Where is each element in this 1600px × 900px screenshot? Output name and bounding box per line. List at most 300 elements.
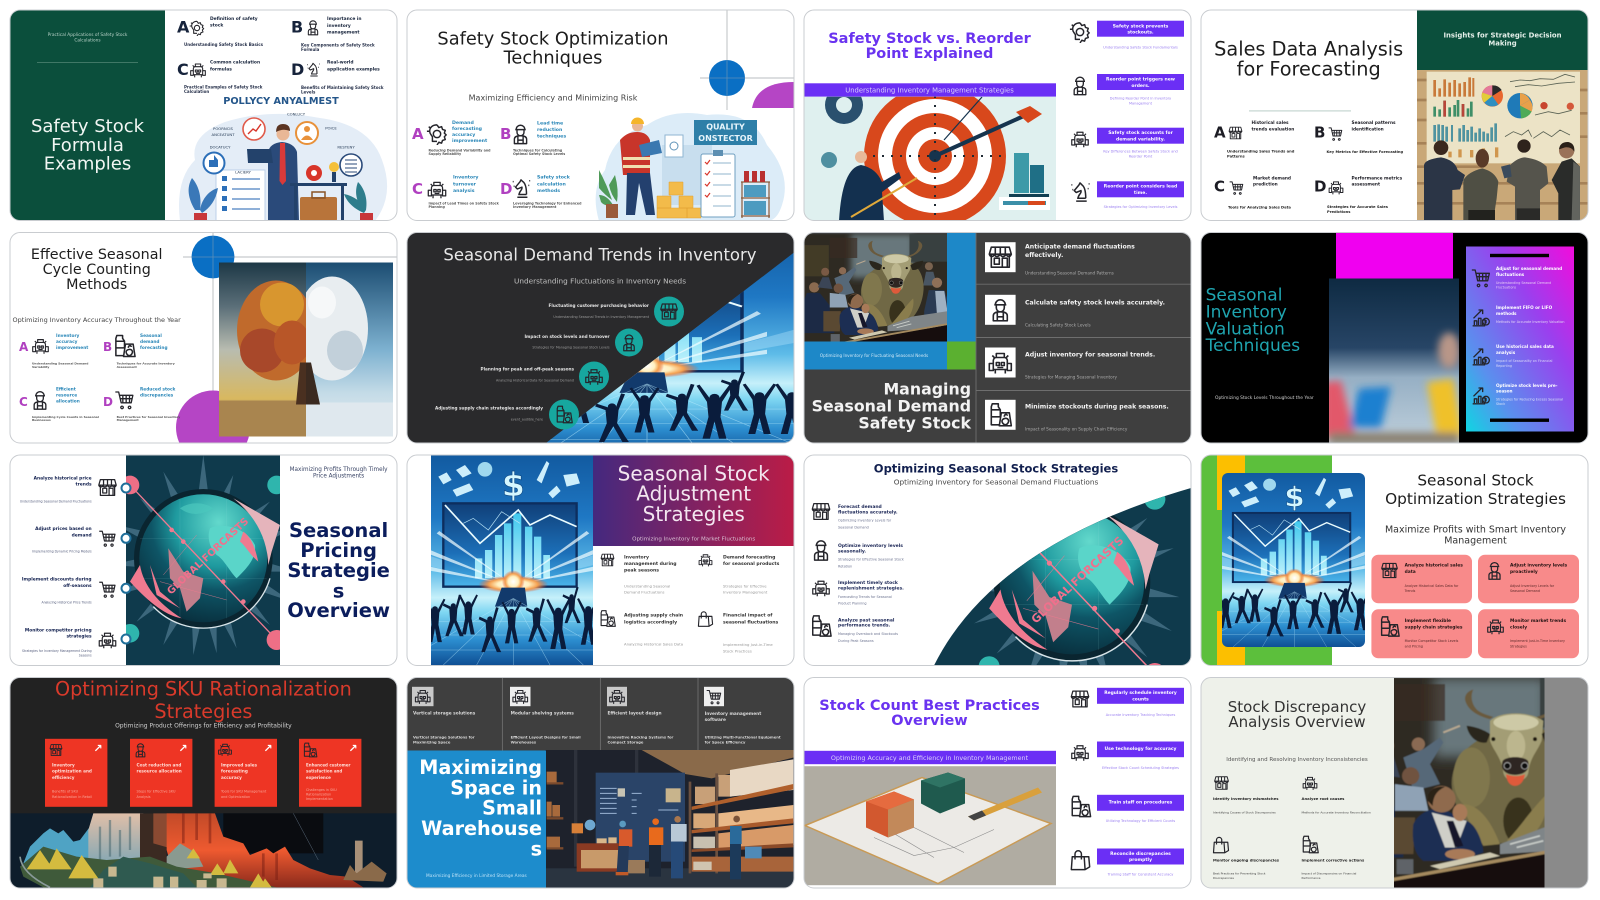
- item 4: [985, 400, 1169, 432]
- item B: demand: [140, 339, 160, 345]
- card 2: Adjust inventory levels: [1510, 562, 1568, 568]
- panel: title header: [593, 455, 794, 546]
- item 1: Analyze historical price: [34, 475, 92, 481]
- item 2: seasonally.: [838, 548, 866, 554]
- subtitle: Maximizing Profits Through Timely: [290, 467, 388, 473]
- item 3: Planning for peak and off-peak seasons: [481, 367, 575, 372]
- item 3: Utilizing Technology for Efficient Counts: [1106, 819, 1175, 823]
- column 4: for Space Efficiency: [705, 740, 746, 744]
- card 3: ↗: [263, 742, 273, 755]
- card 4: Strategies: [1510, 645, 1527, 649]
- item 1: Identifying Causes of Stock Discrepancies: [1213, 810, 1276, 814]
- step 1: Understanding Seasonal Demand: [1496, 281, 1551, 285]
- subtitle band: [804, 83, 1056, 97]
- step 2: [1473, 304, 1565, 326]
- item 2: for seasonal products: [723, 560, 780, 566]
- column 3: Compact Storage: [608, 740, 644, 744]
- item 1: [549, 296, 684, 326]
- item 4: Adjusting supply chain strategies accordingly: [435, 406, 543, 411]
- item C: allocation: [56, 398, 80, 404]
- item C: C: [412, 180, 423, 198]
- item 2: Management: [1129, 102, 1153, 106]
- item 1: Understanding Seasonal Trends in Inventory Management: [553, 315, 650, 319]
- item 3: Product Planning: [838, 602, 867, 606]
- item A: improvement: [452, 138, 488, 144]
- card 1: efficiency: [52, 774, 75, 779]
- item D: Performance metrics: [1352, 175, 1403, 181]
- title: Safety Stock: [31, 116, 145, 136]
- item 2: [699, 554, 780, 594]
- item C: Businesses: [32, 418, 51, 422]
- panel: gradient steps: [1466, 246, 1574, 432]
- title: Effective Seasonal: [31, 247, 162, 263]
- item D: discrepancies: [140, 392, 174, 398]
- title: Point Explained: [866, 46, 993, 62]
- item A: accuracy: [56, 339, 78, 345]
- item C: resource: [56, 392, 77, 398]
- card 4: experience: [306, 774, 331, 779]
- item 3: Safety stock accounts for: [1108, 130, 1174, 136]
- item C: Impact of Lead Times on Safety Stock: [428, 202, 500, 206]
- subtitle: Management: [1444, 535, 1507, 546]
- item A: Definition of safety: [210, 16, 258, 22]
- subtitle: Identifying and Resolving Inventory Inconsistencies: [1226, 757, 1368, 763]
- item 1: effectively.: [1025, 252, 1063, 259]
- step 1: Fluctuations: [1496, 286, 1516, 290]
- column 4: Inventory management: [705, 710, 761, 716]
- decorative purple shape: [752, 82, 794, 108]
- item 4: Strategies for Optimizing Inventory Levels: [1104, 205, 1178, 209]
- card 3: Tools for SKU Management: [220, 790, 267, 794]
- card 4: ↗: [348, 742, 358, 755]
- card 3: Implement flexible: [1405, 618, 1451, 624]
- item 4: time.: [1134, 190, 1147, 196]
- item D: D: [500, 180, 512, 198]
- subtitle: Optimizing Inventory for Seasonal Demand Fluctuations: [894, 478, 1098, 486]
- item C: Inventory: [453, 174, 478, 180]
- item 4: [1302, 836, 1365, 880]
- column 1: [412, 687, 476, 744]
- illustration: burst chart with crowd: [447, 186, 897, 474]
- title: Safety Stock Optimization: [437, 28, 669, 49]
- item B: B: [1314, 124, 1325, 142]
- item 1: trends: [75, 481, 92, 487]
- item D: methods: [537, 188, 560, 194]
- title: Space in: [450, 776, 542, 799]
- slide: Stock Discrepancy Analysis Overview: [1201, 678, 1600, 891]
- item 1: [601, 554, 677, 594]
- photo: bull and trader: [1343, 678, 1600, 891]
- item 2: Calculating Safety Stock Levels: [1025, 322, 1091, 327]
- item 3: Forecasting Trends for Seasonal: [838, 595, 892, 599]
- decorative purple circle: [176, 390, 249, 442]
- item 1: management during: [624, 560, 677, 566]
- item 1: stockouts.: [1127, 29, 1154, 35]
- item 2: Reorder point triggers new: [1106, 76, 1175, 82]
- card 1: Benefits of SKU: [52, 790, 79, 794]
- slide: Effective Seasonal Cycle Counting Methods: [10, 232, 397, 464]
- item C: Implementing Cycle Counts in Seasonal: [32, 415, 99, 419]
- item 2: [1072, 742, 1184, 770]
- illustration: quality inspector: [596, 113, 785, 221]
- item A: A: [177, 18, 190, 36]
- title: Seasonal: [1206, 286, 1282, 306]
- item 1: Fluctuating customer purchasing behavior: [549, 303, 650, 308]
- item 2: Strategies for Managing Seasonal Stock Levels: [532, 346, 610, 350]
- photo: bull and traders: [801, 234, 952, 351]
- title: Safety Stock: [858, 413, 971, 432]
- title: Methods: [66, 277, 127, 293]
- item 2: [524, 328, 643, 356]
- item 1: Inventory: [624, 554, 649, 560]
- title: Stock Count Best Practices: [819, 698, 1040, 714]
- card 2: Seasonal Demand: [1510, 589, 1540, 593]
- slide: Seasonal Inventory Valuation Techniques: [1201, 232, 1588, 444]
- card 1: Trends: [1404, 589, 1416, 593]
- item B: identification: [1352, 126, 1384, 132]
- panel: blue title: [407, 750, 546, 888]
- card 4: Implement Just-in-Time Inventory: [1510, 639, 1565, 643]
- step 4: [1473, 382, 1563, 406]
- title: Formula: [51, 134, 124, 156]
- item 3: Adjust inventory for seasonal trends.: [1025, 352, 1155, 359]
- item 1: Understanding Safety Stock Fundamentals: [1103, 46, 1178, 50]
- item D: Reduced stock: [140, 386, 176, 392]
- subtitle: Price Adjustments: [313, 474, 364, 480]
- item 2: [1302, 777, 1371, 814]
- card 1: Analyze Historical Sales Data for: [1405, 584, 1459, 588]
- item 1: Regularly schedule inventory: [1104, 690, 1177, 696]
- illustration: policy analyst: DOCATUCY: [210, 144, 231, 150]
- photo: team studying charts: [1417, 70, 1590, 223]
- item A: accuracy: [452, 132, 475, 138]
- item C: Tools for Analyzing Sales Data: [1228, 206, 1291, 210]
- item 4: Training Staff for Consistent Accuracy: [1107, 872, 1173, 876]
- item 4: Stock Practices: [723, 648, 752, 653]
- illustration: quality inspector: QUALITY: [706, 122, 745, 131]
- column 1: Vertical Storage Solutions for: [413, 736, 475, 740]
- item A: [19, 333, 88, 369]
- item C: turnover: [453, 181, 477, 187]
- item 3: Analyzing Historical Sales Data: [624, 642, 683, 646]
- title: Optimizing SKU Rationalization: [55, 677, 352, 700]
- item C: [1214, 175, 1291, 210]
- item 1: Understanding Seasonal Demand Fluctuations: [20, 499, 92, 503]
- card 4: Challenges in SKU: [306, 788, 337, 792]
- item 4: [813, 616, 898, 643]
- title: Overview: [891, 713, 968, 729]
- item A: Variability: [32, 365, 49, 369]
- step 3: Use historical sales data: [1496, 344, 1554, 349]
- item C: formulas: [210, 66, 232, 72]
- title: Seasonal Demand Trends in Inventory: [443, 245, 757, 264]
- illustration: policy analyst: [179, 96, 387, 221]
- item 3: [985, 348, 1155, 380]
- photo: blocks and pen on paper: [804, 766, 1056, 885]
- item A: stock: [210, 22, 223, 28]
- item 2: Demand forecasting: [723, 554, 775, 560]
- card 4: [1478, 609, 1579, 658]
- panel: insights heading: Insights for Strategic Decision: [1443, 31, 1562, 39]
- card 1: Inventory: [52, 762, 75, 767]
- magenta block: [1336, 232, 1453, 278]
- item A: A: [1214, 124, 1226, 142]
- item 4: Seasons: [79, 653, 92, 657]
- card 4: closely: [1510, 624, 1527, 630]
- card 1: optimization and: [52, 768, 92, 773]
- item A: Patterns: [1227, 155, 1246, 159]
- item D: calculation: [537, 181, 566, 187]
- item D: Management: [117, 418, 139, 422]
- title: Inventory: [1206, 302, 1287, 322]
- subtitle: Maximize Profits with Smart Inventory: [1385, 524, 1566, 535]
- item 3: replenishment strategies.: [838, 585, 904, 591]
- title: Seasonal Demand: [812, 396, 971, 415]
- subtitle: Calculations: [74, 37, 101, 43]
- card 3: and Optimization: [221, 795, 250, 799]
- card 2: Adjust Inventory Levels for: [1510, 584, 1555, 588]
- item B: B: [103, 340, 112, 354]
- decorative blue circle: [709, 60, 745, 96]
- item D: Inventory Management: [513, 205, 557, 209]
- item D: Benefits of Maintaining Safety Stock: [301, 84, 384, 90]
- step 2: methods: [1496, 310, 1517, 315]
- item A: trends evaluation: [1252, 126, 1294, 132]
- item 4: [698, 612, 779, 653]
- title: Valuation: [1206, 320, 1285, 340]
- title: Strategies: [643, 502, 745, 526]
- colour blocks: [1201, 455, 1332, 666]
- item 4: During Peak Seasons: [838, 639, 874, 643]
- item 1: Understanding Seasonal Demand Patterns: [1025, 270, 1114, 275]
- item 2: Effective Stock Count Scheduling Strategies: [1102, 766, 1179, 770]
- item A: [1214, 120, 1295, 159]
- step 2: Methods for Accurate Inventory Valuation: [1496, 320, 1565, 324]
- card 4: [299, 739, 361, 807]
- column 2: [510, 687, 581, 744]
- item B: Lead time: [537, 120, 563, 126]
- item B: forecasting: [140, 344, 168, 350]
- item C: Efficient: [56, 386, 76, 392]
- subtitle: Maximizing Efficiency and Minimizing Risk: [469, 94, 638, 102]
- item C: Planning: [428, 205, 445, 209]
- item D: Predictions: [1327, 210, 1351, 214]
- item 2: Impact on stock levels and turnover: [524, 334, 611, 339]
- panel: insights heading: [1417, 10, 1588, 70]
- title: Strategies: [154, 699, 252, 722]
- item 3: [22, 576, 130, 604]
- slide: Maximizing Space in Small Warehouses: [407, 678, 797, 888]
- item D: [291, 59, 384, 94]
- photo: warehouse team: [545, 750, 797, 888]
- item C: C: [19, 395, 28, 409]
- item A: forecasting: [452, 126, 482, 132]
- card 2: Steps for Effective SKU: [136, 790, 176, 794]
- card 1: Analyze historical sales: [1405, 562, 1463, 568]
- item B: B: [291, 18, 303, 36]
- illustration: policy analyst: POORNCIS: [213, 126, 234, 130]
- title: Stock Discrepancy: [1228, 698, 1366, 716]
- illustration: policy analyst: RESTENY: [337, 144, 355, 150]
- column 2: Efficient Layout Designs for Small: [511, 736, 581, 740]
- title: Seasonal: [289, 518, 388, 542]
- item 4: [22, 627, 130, 657]
- item 1: Understanding Seasonal: [624, 583, 670, 588]
- item D: Safety stock: [537, 174, 571, 180]
- item 4: event_audible_here: [511, 418, 543, 422]
- title: Techniques: [503, 47, 602, 68]
- item 2: Defining Reorder Point in Inventory: [1110, 96, 1171, 100]
- step 1: Adjust for seasonal demand: [1496, 265, 1562, 270]
- card 1: data: [1405, 568, 1416, 574]
- illustration: 3D data terrain: [10, 813, 400, 893]
- item C: [177, 59, 263, 94]
- slide: Optimizing SKU Rationalization Strategies: [10, 677, 400, 893]
- item 4: [1071, 181, 1184, 209]
- title: for Forecasting: [1237, 57, 1381, 80]
- title: Techniques: [1205, 336, 1300, 356]
- illustration: target with arrow: [804, 96, 1056, 220]
- illustration: policy analyst: LACIERY: [235, 170, 251, 174]
- step 1: [1472, 265, 1562, 290]
- title: Small: [482, 796, 542, 819]
- item 4: promptly: [1129, 857, 1152, 863]
- item C: Practical Examples of Safety Stock: [184, 84, 263, 89]
- title: Safety Stock vs. Reorder: [828, 31, 1032, 47]
- column 3: Efficient layout design: [608, 710, 662, 716]
- item 2: demand: [72, 532, 92, 538]
- item 1: [1213, 777, 1279, 814]
- item 4: Implementing Just-in-Time: [723, 642, 773, 646]
- title: s: [333, 579, 344, 602]
- item 1: [812, 504, 898, 530]
- item B: [500, 120, 566, 156]
- item 2: Strategies for Effective: [723, 583, 767, 588]
- item B: Assessment: [117, 365, 137, 369]
- item 3: demand variability.: [1116, 136, 1165, 142]
- item 1: Safety stock prevents: [1113, 23, 1169, 29]
- item 1: Optimizing Inventory Levels for: [838, 519, 892, 523]
- item 4: strategies: [66, 633, 92, 639]
- card 2: ↗: [178, 742, 188, 755]
- item 3: Best Practices for Preventing Stock: [1213, 872, 1266, 876]
- column 4: [704, 687, 781, 744]
- item B: Techniques for Calculating: [513, 148, 563, 152]
- item A: A: [412, 125, 424, 143]
- item D: assessment: [1352, 181, 1380, 187]
- card 4: Implementation: [306, 797, 333, 801]
- card 3: Monitor Competitor Stock Levels: [1405, 639, 1459, 643]
- item 2: orders.: [1131, 82, 1150, 88]
- title: Cycle Counting: [43, 262, 151, 278]
- title: Overview: [287, 598, 390, 622]
- item A: Understanding Safety Stock Basics: [184, 42, 264, 47]
- item D: D: [1314, 178, 1326, 196]
- item B: [103, 333, 175, 369]
- item B: Importance in: [327, 16, 361, 22]
- item 3: [1213, 837, 1280, 880]
- column 4: software: [705, 716, 726, 722]
- item D: D: [291, 60, 304, 79]
- slide: Stock Count Best Practices Overview: [804, 678, 1191, 888]
- item 2: Use technology for accuracy: [1105, 746, 1177, 752]
- item 1: [985, 242, 1135, 275]
- subtitle: Understanding Fluctuations in Inventory Needs: [514, 276, 686, 285]
- title: Seasonal Stock: [618, 461, 770, 485]
- item 1: Identify inventory mismatches: [1213, 796, 1279, 801]
- step 4: Stock: [1496, 402, 1505, 406]
- illustration: policy analyst: CONLUCY: [287, 112, 306, 116]
- panel: green title panel: [10, 10, 165, 221]
- item 2: Strategies for Effective Seasonal Stock: [838, 558, 904, 562]
- title: Optimization Strategies: [1385, 490, 1566, 508]
- subtitle band: [804, 751, 1056, 764]
- item D: [103, 386, 180, 422]
- slide: Seasonal Stock Adjustment Strategies: [380, 415, 794, 682]
- card 3: [1371, 609, 1472, 658]
- subtitle band: Optimizing Accuracy and Efficiency in Inventory Management: [831, 754, 1029, 762]
- item 1: Accurate Inventory Tracking Techniques: [1106, 713, 1175, 717]
- item 4: Impact of Discrepancies on Financial: [1302, 872, 1357, 876]
- item 1: [1071, 688, 1184, 717]
- item 1: fluctuations accurately.: [838, 509, 898, 515]
- item 2: [815, 541, 904, 569]
- title: Maximizing: [419, 756, 542, 779]
- item B: Seasonal: [140, 333, 162, 339]
- item D: [1314, 175, 1403, 214]
- panel: insights heading: Making: [1488, 40, 1517, 48]
- column 2: Warehouses: [511, 740, 537, 744]
- slide: Seasonal Pricing Strategies Overview: [10, 455, 397, 666]
- slide: Safety Stock Formula Examples: [10, 10, 397, 221]
- item 4: Managing Overstock and Stockouts: [838, 632, 898, 636]
- item 4: Performance: [1302, 876, 1321, 880]
- item B: Optimal Safety Stock Levels: [513, 152, 565, 156]
- item A: Inventory: [56, 333, 80, 339]
- subtitle: Practical Applications of Safety Stock: [48, 32, 128, 38]
- card 4: satisfaction and: [306, 768, 342, 773]
- illustration: globe forecasts: [110, 455, 298, 666]
- item 4: Minimize stockouts during peak seasons.: [1025, 403, 1169, 410]
- item 4: [1071, 848, 1184, 876]
- title: Managing: [883, 379, 971, 398]
- item 2: Implementing Dynamic Pricing Models: [32, 550, 92, 554]
- subtitle: Optimizing Stock Levels Throughout the Year: [1215, 395, 1314, 401]
- item 3: Reorder Point: [1129, 155, 1153, 159]
- item A: improvement: [56, 344, 88, 350]
- item D: Levels: [301, 89, 316, 94]
- card 1: ↗: [93, 742, 103, 755]
- illustration: policy analyst: POICE: [325, 126, 337, 130]
- item 3: Analyzing Historical Data for Seasonal Demand: [496, 378, 574, 382]
- item A: Historical sales: [1252, 120, 1289, 126]
- subtitle: Maximizing Efficiency in Limited Storage Areas: [426, 873, 528, 879]
- card 1: Rationalization in Retail: [52, 795, 92, 799]
- item C: Market demand: [1253, 175, 1291, 181]
- item 2: Inventory Management: [723, 589, 768, 594]
- step 3: Impact of Seasonality on Financial: [1496, 359, 1552, 363]
- card 3: forecasting: [221, 768, 248, 773]
- item 4: Monitor competitor pricing: [25, 627, 92, 633]
- item 2: [1074, 74, 1184, 106]
- illustration: burst chart with crowd: [1177, 440, 1441, 661]
- slide: Managing Seasonal Demand Safety Stock: [801, 232, 1191, 444]
- slide: Sales Data Analysis for Forecasting: [1201, 10, 1590, 223]
- item C: [19, 386, 99, 422]
- title: s: [531, 837, 542, 860]
- item 2: Methods for Accurate Inventory Reconciliation: [1302, 810, 1371, 814]
- item D: [500, 174, 582, 209]
